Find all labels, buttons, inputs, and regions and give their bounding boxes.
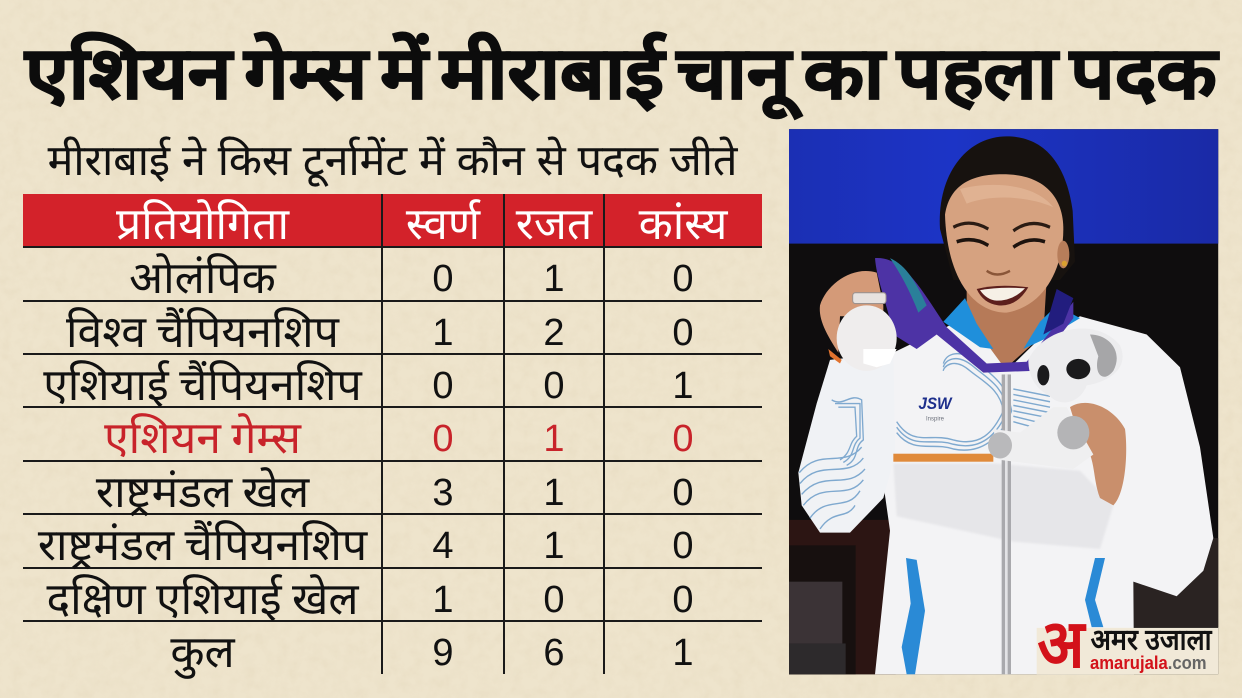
jacket sponsor logo: Inspire: [926, 415, 944, 422]
blue side stripes: [902, 558, 925, 674]
publisher logo: अ: [1037, 607, 1087, 682]
hand holding medal: [820, 271, 883, 353]
medal table: 1: [432, 579, 454, 621]
medal table: 0: [672, 579, 694, 621]
jacket shading: [893, 464, 1113, 549]
medal table: [23, 194, 762, 679]
purple ribbon: [875, 258, 1073, 373]
row: World Championship: विश्व चैंपियनशिप: [66, 308, 339, 357]
medal table: 9: [432, 632, 454, 674]
medal table: 0: [543, 579, 565, 621]
medal table: 1: [543, 258, 565, 300]
title: एशियन गेम्स में मीराबाई चानू का पहला पदक: [25, 34, 1217, 114]
hand holding mascot: [1070, 403, 1126, 505]
face: [945, 174, 1063, 313]
medal table: 4: [432, 525, 454, 567]
subtitle: मीराबाई ने किस टूर्नामेंट में कौन से पदक जीते: [48, 137, 737, 185]
mascot toy: [988, 331, 1117, 462]
publisher logo: अमर उजाला: [1091, 624, 1213, 656]
medal table: 0: [672, 525, 694, 567]
row: Commonwealth Championship: राष्ट्रमंडल चैंपियनशिप: [38, 521, 367, 570]
medal table: 0: [432, 365, 454, 407]
medal table: 2: [543, 312, 565, 354]
row: Asian Games highlighted: एशियन गेम्स: [104, 414, 301, 463]
medal table: 0: [432, 418, 454, 460]
medal table: 0: [672, 472, 694, 514]
sleeve wave pattern: [799, 354, 1050, 529]
medal table: 0: [672, 312, 694, 354]
photo of athlete with medal and mascot: [789, 129, 1218, 674]
jacket torso and right arm: [875, 316, 1213, 674]
tricolour stripe: [893, 454, 993, 462]
silver medal: [837, 293, 897, 371]
smile: [977, 286, 1028, 306]
jacket sponsor logo: JSW: [918, 394, 953, 413]
zipper: [1002, 374, 1011, 674]
medal table: कांस्य: [639, 200, 727, 249]
row: South Asian Games: दक्षिण एशियाई खेल: [46, 575, 359, 624]
neck: [966, 287, 1046, 363]
medal table: स्वर्ण: [406, 200, 480, 249]
medal table: 0: [432, 258, 454, 300]
row: Asian Championship: एशियाई चैंपियनशिप: [43, 361, 362, 410]
medal table: 3: [432, 472, 454, 514]
medal table: 1: [543, 472, 565, 514]
header row: प्रतियोगिता: [116, 200, 289, 249]
medal table: 1: [432, 312, 454, 354]
table header band: [23, 194, 762, 247]
medal table: रजत: [516, 200, 592, 249]
row: Olympics: ओलंपिक: [129, 254, 276, 303]
jacket sponsor logo: [918, 398, 952, 422]
medal table: 6: [543, 632, 565, 674]
publisher logo: amarujala.com: [1090, 652, 1207, 673]
medal table: 1: [543, 525, 565, 567]
medal table: 0: [543, 365, 565, 407]
medal table: 0: [672, 418, 694, 460]
hair: [940, 136, 1074, 244]
row: Total: कुल: [170, 628, 235, 677]
publisher logo: [1036, 624, 1218, 674]
medal table: 1: [543, 418, 565, 460]
left sleeve: [798, 353, 895, 533]
medal table: 1: [672, 632, 694, 674]
medal table: 0: [672, 258, 694, 300]
photo backdrop: [789, 129, 1218, 674]
medal table: 1: [672, 365, 694, 407]
collar: [943, 298, 993, 349]
row: Commonwealth Games: राष्ट्रमंडल खेल: [96, 468, 309, 517]
